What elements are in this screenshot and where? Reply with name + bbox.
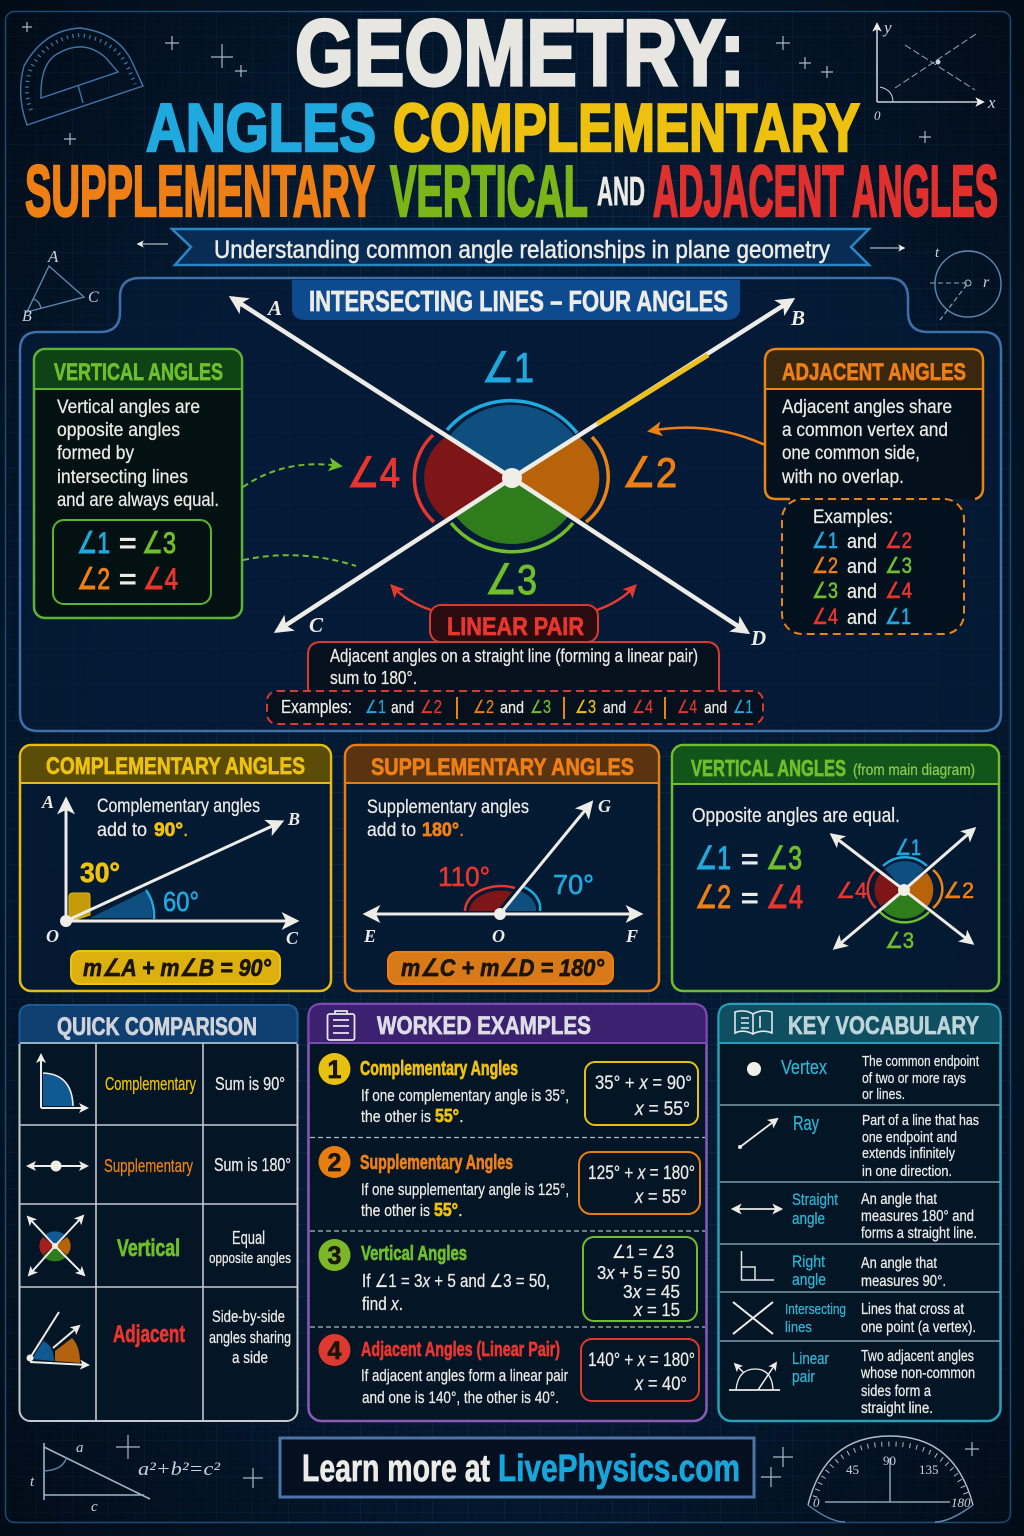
angle sectors xyxy=(414,401,608,552)
example 2: the other is xyxy=(361,1201,430,1220)
title: AND xyxy=(597,168,645,214)
example 1: 35° + x = 90° xyxy=(595,1073,692,1094)
arrows: linear pair xyxy=(392,586,635,610)
linear pair examples: ∠3 xyxy=(575,697,596,717)
panel: supplementary angles: SUPPLEMENTARY ANGLES xyxy=(371,754,634,781)
linear pair examples: and xyxy=(500,698,524,717)
callout: vertical angles: and are always equal. xyxy=(57,490,219,511)
decorative small arrows xyxy=(138,244,904,248)
panel: worked examples: WORKED EXAMPLES xyxy=(377,1012,591,1040)
callout: adjacent angles xyxy=(765,349,983,499)
example 4: 4 xyxy=(328,1337,342,1365)
formula: supplementary: m∠C + m∠D = 180° xyxy=(401,955,604,982)
diagram: complementary: C xyxy=(286,928,299,948)
decorative icon: triangle ABC: A xyxy=(47,247,59,266)
example 3: 3x = 45 xyxy=(623,1282,680,1302)
example 1: Complementary Angles xyxy=(360,1058,518,1080)
decorative plus marks xyxy=(22,22,931,145)
panel: vertical angles summary: = xyxy=(741,882,759,915)
equality box: ∠4 xyxy=(143,563,178,596)
vocab: right angle: Right xyxy=(792,1252,825,1271)
vocab: ray: Part of a line that has xyxy=(862,1112,979,1129)
example 1: . xyxy=(459,1107,464,1126)
vocab: right angle: angle xyxy=(792,1270,826,1289)
panel: quick comparison: Adjacent xyxy=(113,1321,185,1348)
decorative icon: xy axes: x xyxy=(987,93,996,112)
decorative icon: xy axes: y xyxy=(882,18,892,37)
panel: quick comparison: a side xyxy=(232,1348,268,1367)
example 3: find x. xyxy=(362,1294,403,1314)
diagram: supplementary xyxy=(363,796,640,946)
panel: quick comparison: Vertical xyxy=(117,1235,180,1262)
decorative icon: dial xyxy=(808,1436,973,1522)
panel: quick comparison: Sum is 180° xyxy=(214,1155,291,1175)
diagram: complementary: 60° xyxy=(163,886,199,917)
linear pair badge: LINEAR PAIR xyxy=(447,613,584,641)
example 2: 2 xyxy=(328,1149,341,1177)
example 2: x = 55° xyxy=(634,1187,687,1208)
panel: quick comparison: Side-by-side xyxy=(212,1307,285,1326)
vocab: linear pair: whose non-common xyxy=(860,1365,975,1382)
angle labels: ∠1 xyxy=(482,344,534,391)
example 2: . xyxy=(458,1201,463,1220)
vocab: right angle: An angle that xyxy=(861,1255,938,1272)
vocab: intersecting lines: one point (a vertex). xyxy=(861,1319,976,1336)
example 2: If one supplementary angle is 125°, xyxy=(361,1180,569,1199)
equality box: ∠1 xyxy=(77,527,110,560)
title: ANGLES xyxy=(146,90,376,166)
example 4 xyxy=(318,1334,699,1407)
example 1: 1 xyxy=(328,1056,342,1084)
icon: straight line xyxy=(28,1160,87,1172)
examples box: adjacent: ∠4 xyxy=(885,578,912,603)
decorative plus marks footer xyxy=(116,1435,979,1488)
decorative icon: dial: 135 xyxy=(919,1462,938,1477)
example 1: x = 55° xyxy=(634,1099,690,1120)
examples box: adjacent: ∠2 xyxy=(812,553,838,578)
panel: quick comparison: Supplementary xyxy=(104,1156,193,1176)
mini diagram: intersecting lines: ∠3 xyxy=(885,928,914,953)
decorative icon: pythagoras triangle: a xyxy=(76,1440,84,1456)
example 2 xyxy=(318,1146,700,1220)
example 4: If adjacent angles form a linear pair xyxy=(361,1366,568,1385)
panel: complementary angles: add to xyxy=(97,820,147,841)
arrow: adjacent angles to angle 2 xyxy=(650,428,765,445)
vocab: ray xyxy=(738,1112,979,1180)
linear pair examples: ∠4 xyxy=(677,697,697,717)
panel: quick comparison: Sum is 90° xyxy=(215,1074,285,1094)
linear pair description xyxy=(308,642,719,690)
icon: crossing lines xyxy=(28,1216,84,1275)
vocab: linear pair: straight line. xyxy=(861,1400,933,1417)
vocab: straight angle: angle xyxy=(792,1209,825,1228)
example 3: ∠1 = ∠3 xyxy=(612,1242,674,1262)
title: SUPPLEMENTARY xyxy=(25,152,375,232)
heading tab: INTERSECTING LINES – FOUR ANGLES xyxy=(309,286,728,318)
equality box: = xyxy=(119,563,137,596)
linear pair examples: and xyxy=(704,698,727,717)
diagram: complementary: A xyxy=(41,792,54,812)
callout: vertical angles: opposite angles xyxy=(57,420,180,441)
linear pair examples: ∠1 xyxy=(365,697,386,717)
decorative icon: dial: 45 xyxy=(846,1462,859,1477)
linear pair examples: ∠3 xyxy=(530,697,551,717)
panel: complementary angles xyxy=(20,745,331,991)
callout: vertical angles: Vertical angles are xyxy=(57,397,200,418)
callout: adjacent angles: with no overlap. xyxy=(781,467,904,488)
vocab: linear pair: Two adjacent angles xyxy=(861,1348,974,1365)
callout: adjacent angles: a common vertex and xyxy=(782,420,948,441)
example 1 xyxy=(318,1053,698,1126)
panel: vertical angles summary: VERTICAL ANGLES xyxy=(691,755,846,781)
examples box: adjacent: and xyxy=(847,607,877,629)
callout: vertical angles: formed by xyxy=(57,443,134,464)
linear pair examples: ∠1 xyxy=(733,697,753,717)
decorative icon: circle radius: t xyxy=(935,245,940,261)
diagram: supplementary: O xyxy=(492,926,505,946)
diagram: supplementary: 70° xyxy=(553,869,594,900)
panel: vertical angles summary: ∠4 xyxy=(766,879,803,915)
icon: book xyxy=(735,1011,772,1034)
callout: adjacent angles: one common side, xyxy=(782,443,920,464)
decorative icon: xy axes: 0 xyxy=(874,108,881,123)
diagram: complementary xyxy=(41,792,300,948)
examples box: adjacent: ∠3 xyxy=(812,578,838,603)
subtitle ribbon: Understanding common angle relationships in plane geometry xyxy=(214,236,830,264)
examples box: adjacent xyxy=(782,499,964,634)
intersecting lines: C xyxy=(309,613,324,637)
angle labels: ∠3 xyxy=(485,556,537,603)
examples box: adjacent: and xyxy=(847,581,877,603)
title: VERTICAL xyxy=(390,152,588,232)
panel: key vocabulary: KEY VOCABULARY xyxy=(788,1012,979,1040)
panel: quick comparison: angles sharing xyxy=(209,1328,291,1347)
example 4: Adjacent Angles (Linear Pair) xyxy=(361,1339,560,1361)
examples box: adjacent: Examples: xyxy=(813,507,893,528)
example 3: 3x + 5 = 50 xyxy=(597,1263,680,1283)
example 3 xyxy=(318,1237,697,1321)
example 1: the other is xyxy=(361,1107,431,1126)
examples box: adjacent: ∠2 xyxy=(885,528,912,553)
arrow: vertical angles to angle 4 xyxy=(243,464,356,566)
panel: supplementary angles: 180° xyxy=(422,820,459,841)
vocab: vertex: Vertex xyxy=(781,1057,827,1079)
footer banner xyxy=(280,1438,754,1497)
linear pair description: Adjacent angles on a straight line (forming a linear pair) xyxy=(330,646,698,666)
decorative icon: triangle ABC xyxy=(22,247,99,325)
callout: vertical angles: intersecting lines xyxy=(57,467,188,488)
example 4: and one is 140°, the other is 40°. xyxy=(362,1388,559,1407)
panel: vertical angles summary: Opposite angles are equal. xyxy=(692,805,900,827)
vocab: ray: one endpoint and xyxy=(862,1129,957,1146)
mini diagram: intersecting lines: ∠2 xyxy=(943,878,974,903)
vocab: intersecting lines xyxy=(733,1301,976,1336)
vocab: ray: Ray xyxy=(793,1113,819,1135)
vocab: vertex: or lines. xyxy=(862,1086,905,1103)
decorative icon: xy axes xyxy=(874,18,996,123)
decorative icon: pythagoras triangle: a²+b²=c² xyxy=(138,1459,220,1480)
footer banner: Learn more at xyxy=(302,1448,490,1490)
panel: quick comparison: Complementary xyxy=(105,1074,196,1094)
panel: intersecting lines main xyxy=(20,278,1001,731)
panel: key vocabulary xyxy=(718,1004,1000,1421)
equality box: ∠3 xyxy=(142,527,176,560)
callout: vertical angles xyxy=(34,349,242,618)
panel: vertical angles summary: = xyxy=(741,843,759,876)
decorative icon: pythagoras triangle: c xyxy=(91,1499,98,1515)
vocab: linear pair: Linear xyxy=(792,1349,829,1368)
vocab: vertex: of two or more rays xyxy=(862,1070,966,1087)
decorative icon: protractor xyxy=(21,28,143,125)
vocab: linear pair: pair xyxy=(792,1367,815,1386)
example 3: x = 15 xyxy=(633,1300,680,1320)
example 1: If one complementary angle is 35°, xyxy=(361,1086,569,1105)
vocab: straight angle: An angle that xyxy=(861,1191,938,1208)
panel: vertical angles summary: (from main diagram) xyxy=(853,762,975,779)
example 2: Supplementary Angles xyxy=(360,1152,513,1174)
vocab: linear pair: sides form a xyxy=(861,1383,931,1400)
icon: adjacent angles xyxy=(26,1312,88,1365)
intersecting lines: D xyxy=(750,626,766,650)
examples box: adjacent: ∠1 xyxy=(812,528,838,553)
intersecting lines xyxy=(232,296,805,650)
linear pair examples: ∠2 xyxy=(473,697,494,717)
example 3: If ∠1 = 3x + 5 and ∠3 = 50, xyxy=(362,1271,550,1291)
examples box: adjacent: ∠4 xyxy=(812,604,838,629)
panel: complementary angles: . xyxy=(183,820,188,841)
diagram: supplementary: E xyxy=(363,926,376,946)
vocab: right angle xyxy=(742,1251,946,1290)
equality box xyxy=(53,520,211,604)
vocab: straight angle xyxy=(733,1190,977,1242)
panel: quick comparison: Equal xyxy=(232,1228,265,1248)
mini diagram: intersecting lines: ∠4 xyxy=(836,878,867,903)
intersecting lines: A xyxy=(266,296,282,320)
intersecting lines: B xyxy=(790,306,805,330)
decorative icon: dial: 0 xyxy=(813,1495,820,1510)
callout: adjacent angles: ADJACENT ANGLES xyxy=(782,359,966,386)
decorative icon: triangle ABC: C xyxy=(88,289,99,306)
panel: vertical angles summary: ∠1 xyxy=(695,840,731,876)
panel: quick comparison: QUICK COMPARISON xyxy=(57,1013,257,1041)
angle labels: ∠2 xyxy=(622,449,677,496)
panel: vertical angles summary: ∠3 xyxy=(766,840,802,876)
panel: vertical angles summary: ∠2 xyxy=(695,879,731,915)
heading tab xyxy=(292,280,740,320)
example 4: x = 40° xyxy=(634,1374,687,1395)
vocab: ray: in one direction. xyxy=(862,1163,952,1180)
footer banner: LivePhysics.com xyxy=(498,1448,740,1490)
linear pair examples: and xyxy=(603,698,626,717)
examples box: adjacent: and xyxy=(847,556,877,578)
decorative icon: triangle ABC: B xyxy=(22,308,32,325)
mini diagram: intersecting lines: ∠1 xyxy=(895,835,921,860)
linear pair examples: Examples: xyxy=(281,697,352,717)
linear pair badge xyxy=(430,605,598,642)
linear pair examples xyxy=(267,691,763,724)
panel: complementary angles: 90° xyxy=(154,820,183,841)
formula: complementary: m∠A + m∠B = 90° xyxy=(83,955,271,982)
vocab: linear pair xyxy=(729,1348,975,1417)
example 2: 55° xyxy=(434,1200,458,1220)
linear pair description: sum to 180°. xyxy=(330,668,417,688)
decorative icon: circle radius: r xyxy=(983,274,990,291)
vocab: intersecting lines: lines xyxy=(785,1319,812,1336)
example 1: 55° xyxy=(435,1106,459,1126)
mini diagram: intersecting lines xyxy=(832,829,974,953)
callout: adjacent angles: Adjacent angles share xyxy=(782,397,952,418)
panel: quick comparison: opposite angles xyxy=(209,1250,291,1267)
title: GEOMETRY: xyxy=(295,0,745,105)
diagram: supplementary: 110° xyxy=(438,861,490,892)
vocab: straight angle: Straight xyxy=(792,1190,838,1209)
panel: complementary angles: COMPLEMENTARY ANGLES xyxy=(46,753,305,780)
decorative icon: circle radius xyxy=(930,245,1001,320)
vocab: intersecting lines: Intersecting xyxy=(785,1301,846,1318)
title: COMPLEMENTARY xyxy=(393,90,860,166)
vocab: intersecting lines: Lines that cross at xyxy=(861,1301,965,1318)
panel: supplementary angles: Supplementary angles xyxy=(367,797,529,818)
example 3: 3 xyxy=(328,1242,341,1270)
equality box: ∠2 xyxy=(77,563,110,596)
panel: quick comparison xyxy=(20,1005,298,1421)
diagram: complementary: 30° xyxy=(80,857,120,888)
icon: clipboard xyxy=(328,1011,354,1040)
example 4: 140° + x = 180° xyxy=(588,1350,695,1371)
angle labels: ∠4 xyxy=(347,449,400,496)
vocab: straight angle: measures 180° and xyxy=(861,1208,974,1225)
vocab: straight angle: forms a straight line. xyxy=(861,1225,977,1242)
panel: supplementary angles xyxy=(345,745,659,991)
angle labels xyxy=(347,344,677,603)
vocab: vertex: The common endpoint xyxy=(862,1053,980,1070)
vocab: vertex xyxy=(747,1053,980,1103)
diagram: complementary: O xyxy=(46,926,59,946)
example 2: 125° + x = 180° xyxy=(588,1163,695,1184)
examples box: adjacent: ∠1 xyxy=(885,604,911,629)
panel: vertical angles summary xyxy=(672,745,999,991)
vocab: ray: extends infinitely xyxy=(862,1145,955,1162)
panel: worked examples xyxy=(308,1004,706,1421)
linear pair examples: ∠4 xyxy=(632,697,653,717)
icon: right angle xyxy=(41,1055,87,1108)
examples box: adjacent: and xyxy=(847,531,877,553)
panel: supplementary angles: . xyxy=(459,820,464,841)
example 3: Vertical Angles xyxy=(361,1243,467,1265)
decorative icon: pythagoras triangle: t xyxy=(30,1474,35,1490)
title xyxy=(25,0,998,232)
diagram: supplementary: F xyxy=(625,926,638,946)
diagram: complementary: B xyxy=(287,809,300,829)
diagram: supplementary: G xyxy=(598,796,611,816)
panel: supplementary angles: add to xyxy=(367,820,416,841)
linear pair examples: and xyxy=(391,698,414,717)
decorative icon: dial: 180 xyxy=(951,1495,971,1510)
examples box: adjacent: ∠3 xyxy=(885,553,912,578)
linear pair examples: ∠2 xyxy=(420,697,442,717)
decorative icon: dial: 90 xyxy=(883,1453,896,1468)
equality box: = xyxy=(119,527,137,560)
decorative icon: pythagoras triangle xyxy=(30,1440,220,1515)
callout: vertical angles: VERTICAL ANGLES xyxy=(54,359,223,386)
panel: complementary angles: Complementary angles xyxy=(97,796,260,817)
vocab: right angle: measures 90°. xyxy=(861,1273,946,1290)
